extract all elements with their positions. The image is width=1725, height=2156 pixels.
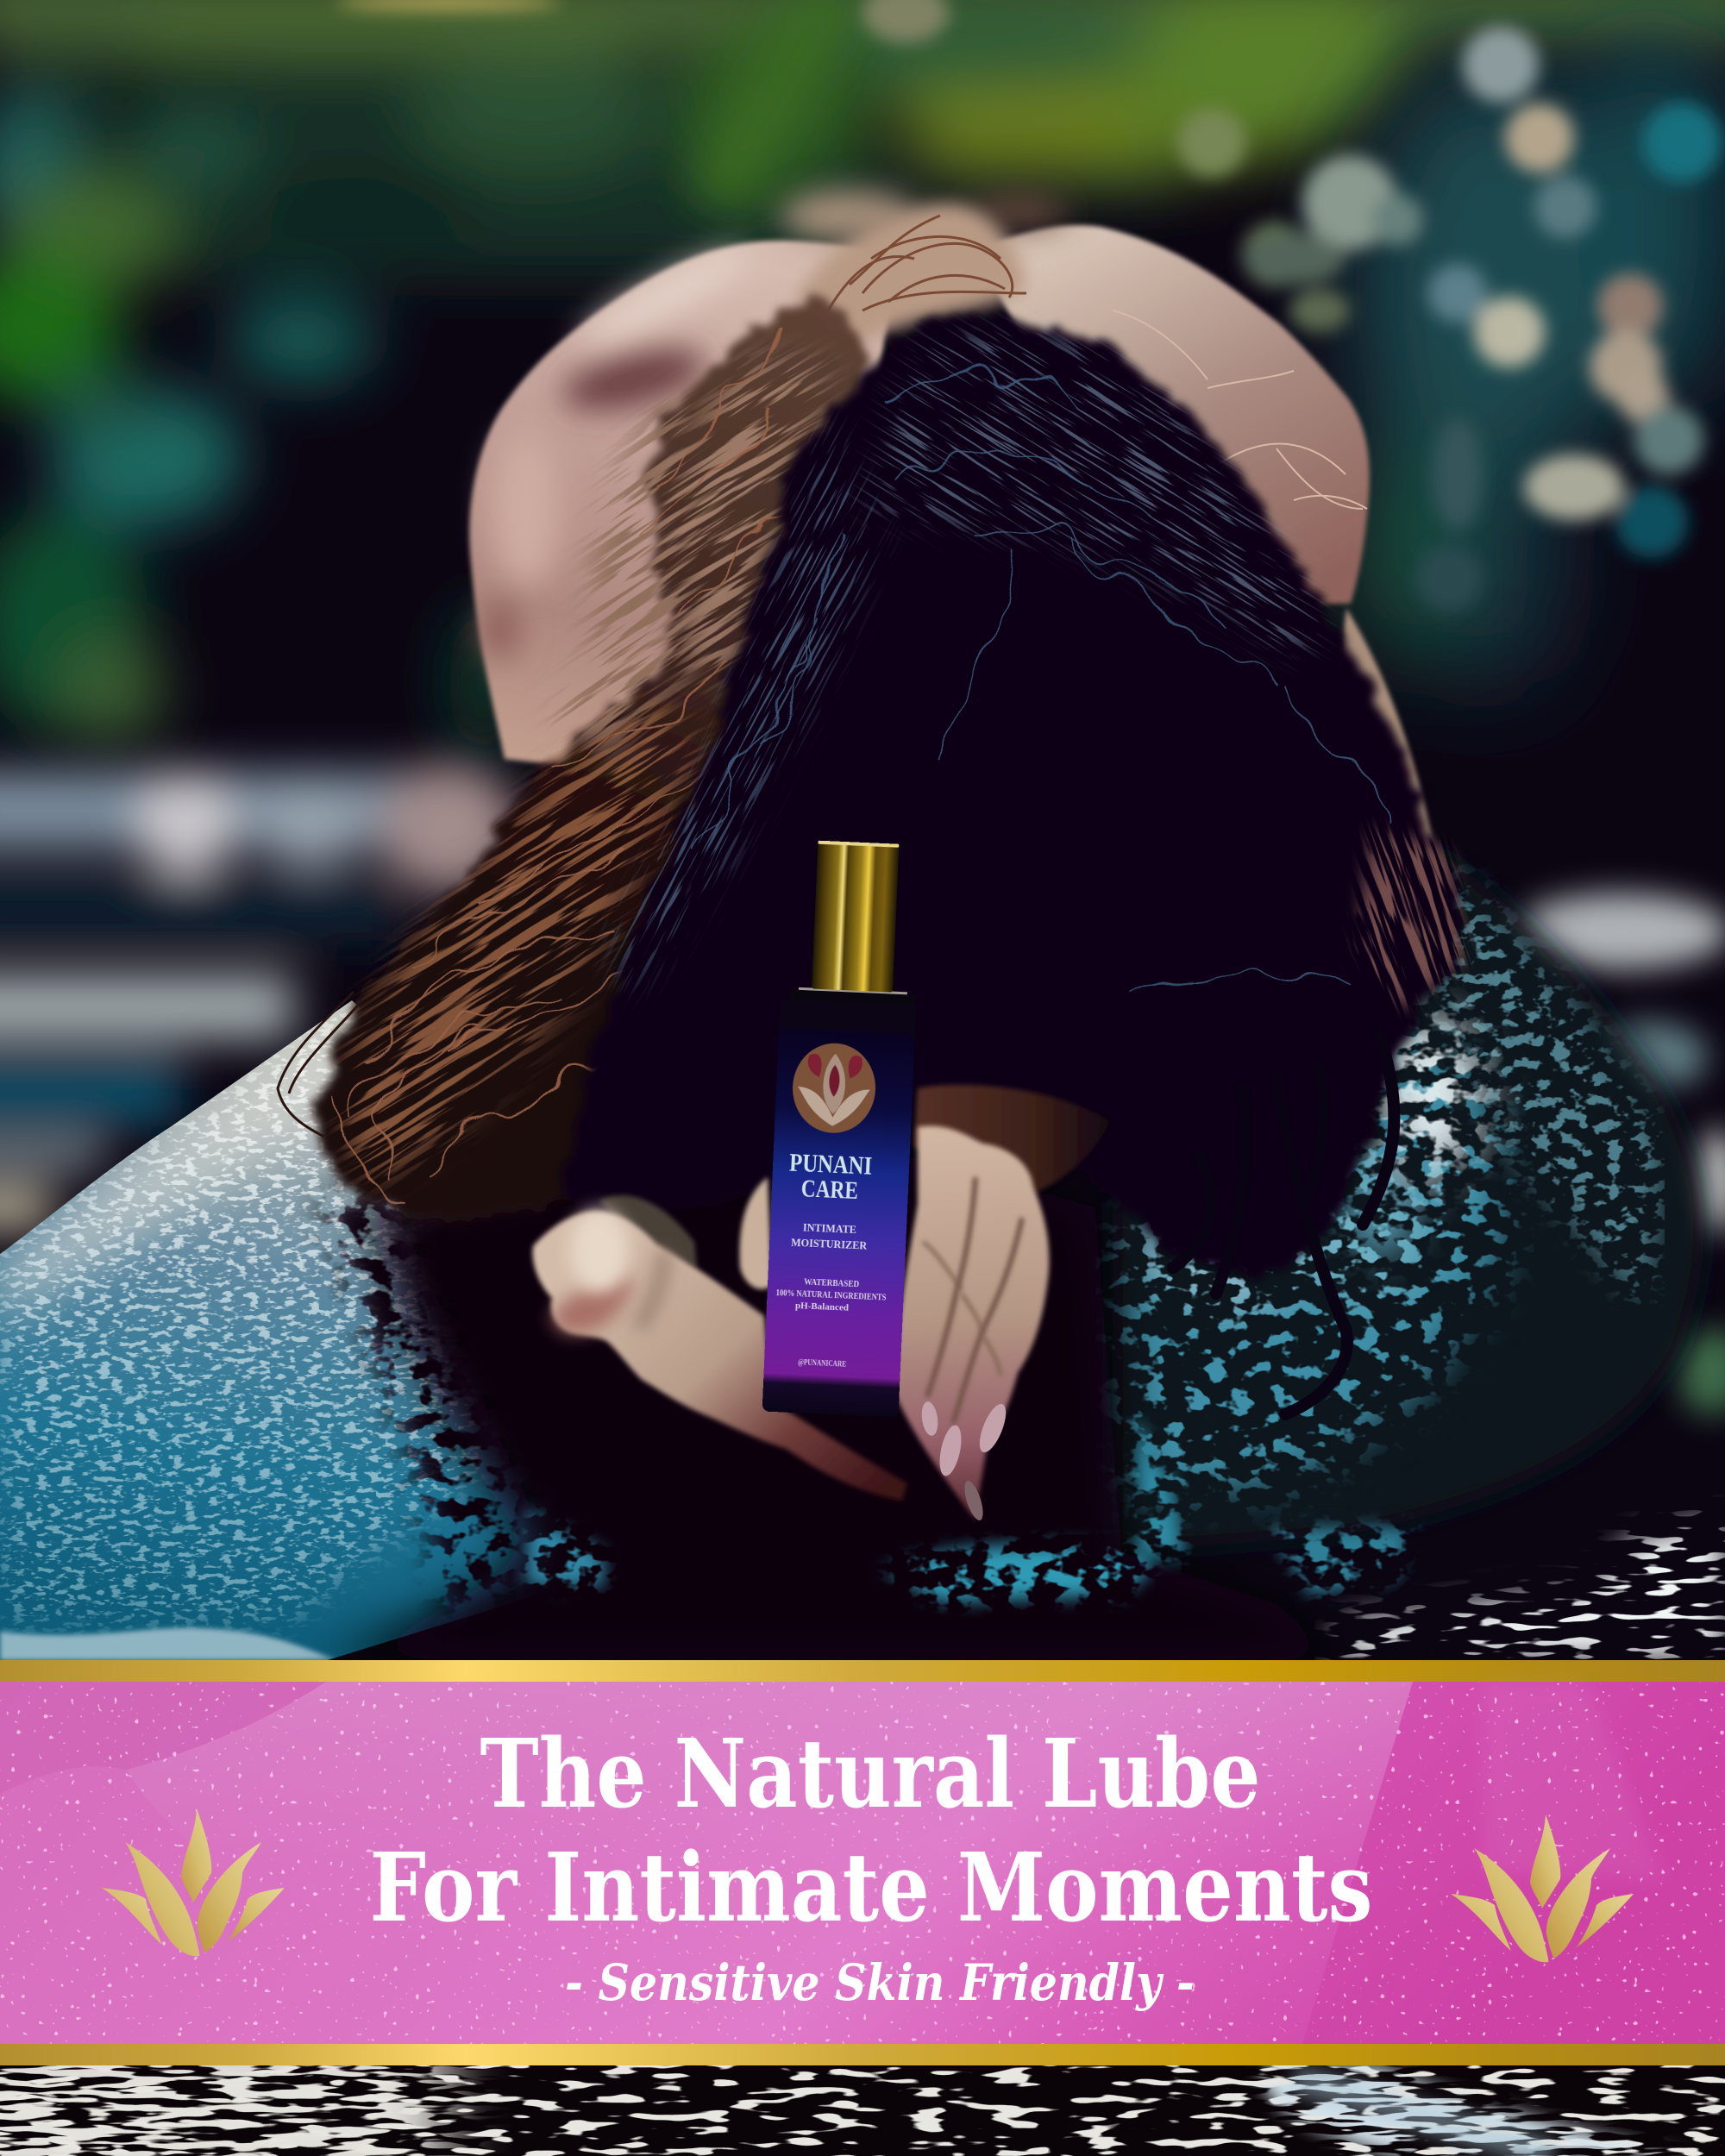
- bottle collar and body: [762, 987, 917, 1417]
- dense glints at left: [0, 2065, 499, 2156]
- blurred river background left: [0, 763, 518, 1229]
- bokeh highlights: [336, 0, 1722, 611]
- shoulder blade shadow: [556, 336, 712, 423]
- photo: left wet rock: [0, 1000, 547, 1660]
- icon: lotus right: [1451, 1814, 1634, 1962]
- white water glints right: [1328, 1518, 1725, 1660]
- gold bar bottom: [0, 2044, 1725, 2065]
- bottle label text: MOISTURIZER: [791, 1236, 868, 1252]
- bottle label text: INTIMATE: [803, 1220, 856, 1236]
- foam at rock base: [0, 1628, 336, 1660]
- bottle label text: @PUNANICARE: [798, 1357, 846, 1369]
- white water glints: [0, 2065, 1725, 2156]
- rock bright top glaze: [0, 1018, 397, 1319]
- hair strands navy: [690, 373, 1397, 992]
- banner light centre facet: [127, 1682, 1413, 2044]
- left open hand: [532, 1209, 907, 1501]
- blurred river background right: [1514, 893, 1725, 1414]
- title text: For Intimate Moments: [369, 1832, 1373, 1943]
- product bottle: [762, 839, 923, 1417]
- rock highlights: [1117, 1035, 1509, 1501]
- nails: [919, 1401, 1011, 1522]
- photo: hands: [532, 1085, 1110, 1522]
- finger grooves: [927, 1177, 1022, 1423]
- photo: water lower centre and right: [319, 1121, 1725, 1660]
- wispy hair over right shoulder: [1113, 310, 1367, 509]
- bottle label text: CARE: [800, 1175, 859, 1205]
- brown strands: [328, 328, 802, 1203]
- brown hair mass: [317, 286, 862, 1219]
- bottle label text: 100% NATURAL INGREDIENTS: [775, 1288, 887, 1303]
- navy hair fibres right: [718, 125, 1472, 865]
- thumb tip shading: [552, 1276, 634, 1333]
- gold bar top: [0, 1660, 1725, 1682]
- wrist behind left hand: [599, 1195, 697, 1268]
- navy hair fibres left: [378, 307, 1123, 1107]
- photo: hair: [0, 125, 1524, 1414]
- tan hair fringe on left skin: [373, 306, 886, 832]
- title text: The Natural Lube: [480, 1718, 1261, 1829]
- rock upper-right texture: [1432, 862, 1665, 1311]
- brown tips at right: [1296, 792, 1524, 1045]
- bottle label text: pH-Balanced: [795, 1301, 850, 1313]
- bottle label text: [773, 1148, 893, 1370]
- photo: woman's back: [469, 190, 1433, 845]
- right hand on bottle: [893, 1126, 1049, 1522]
- bottle label text: PUNANI: [788, 1149, 873, 1181]
- photo: background foliage bokeh: [0, 0, 1725, 1660]
- back right shoulder: [975, 225, 1433, 845]
- thumb highlight: [570, 1209, 629, 1292]
- finger behind bottle: [739, 1177, 772, 1289]
- bottle logo: [791, 1042, 877, 1135]
- foliage: diagonal green stalk: [690, 0, 862, 207]
- speckled shadow edge on left rock: [319, 1190, 552, 1621]
- dark hair mass: [569, 315, 1466, 1275]
- thin flyaway strands over rock: [278, 992, 362, 1137]
- back left shoulder: [469, 238, 897, 776]
- bottom water strip: [0, 2065, 1725, 2156]
- knuckle creases: [923, 1242, 1000, 1376]
- curly tan hair on top of the neck: [781, 190, 1070, 345]
- brown hair highlights: [0, 145, 1196, 1399]
- banner facet left: [0, 1682, 326, 1794]
- title text: [369, 1718, 1373, 1943]
- subtitle text: - Sensitive Skin Friendly -: [565, 1953, 1195, 2012]
- photo: right wet rock: [1113, 849, 1703, 1552]
- foliage: green blurred blobs: [0, 0, 1725, 759]
- blue swash at right: [1261, 2066, 1690, 2156]
- rock sparkle highlights: [0, 1000, 509, 1621]
- teal pool patches: [526, 1414, 1414, 1602]
- foliage: soft teal behind bokeh: [1354, 17, 1725, 690]
- forearm behind right hand: [914, 1085, 1110, 1194]
- palm crease shadow: [638, 1250, 664, 1328]
- bottle gold cap: [812, 841, 899, 993]
- hair tendrils over right rock: [1173, 1035, 1394, 1414]
- pink title banner: [0, 1682, 1725, 2044]
- icon: lotus left: [102, 1808, 285, 1956]
- bottle label text: WATERBASED: [804, 1277, 859, 1289]
- banner peak right: [1484, 1682, 1665, 1880]
- banner sparkles: [0, 1682, 1725, 2044]
- shoulder highlight: [572, 238, 756, 357]
- bright patch on rock crown: [1346, 1013, 1484, 1259]
- banner facet right: [1302, 1682, 1725, 2044]
- deep shadow under body: [328, 1121, 1346, 1660]
